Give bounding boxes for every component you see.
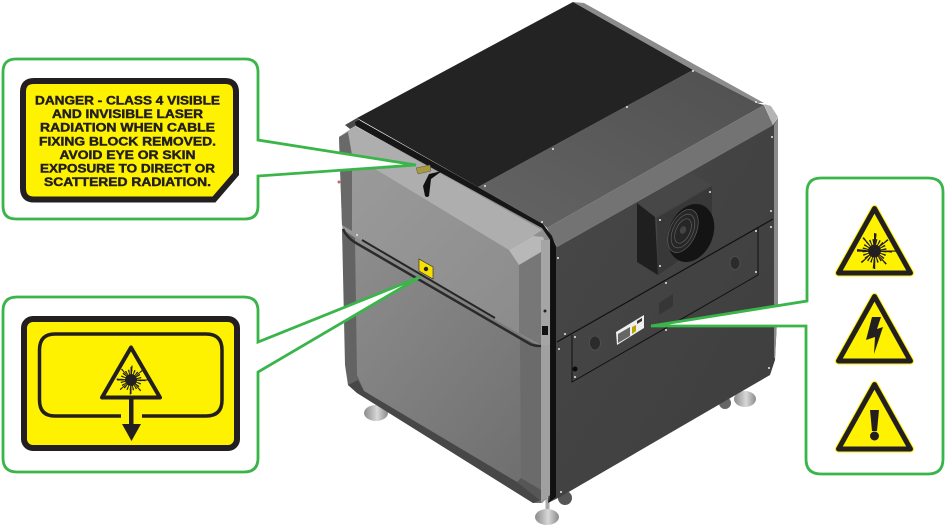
panel round ports (590, 256, 740, 350)
aperture sign (24, 319, 237, 448)
danger text: EXPOSURE TO DIRECT OR (40, 162, 215, 176)
top rear silver trim (573, 2, 764, 103)
danger text: DANGER - CLASS 4 VISIBLE (35, 94, 220, 108)
laser triangle (102, 348, 160, 398)
icon: laser warning (838, 208, 910, 273)
callout: rear hazard symbols (651, 178, 943, 474)
latch strap (423, 171, 442, 197)
door seam (343, 229, 541, 346)
top black panel (357, 2, 693, 187)
callout outline (651, 178, 943, 474)
inner frame (40, 334, 222, 416)
feet (364, 391, 756, 525)
danger text: RADIATION WHEN CABLE (40, 120, 215, 134)
rear data label (616, 315, 644, 345)
danger text: AND INVISIBLE LASER (52, 107, 203, 121)
fan housing (637, 172, 723, 275)
top light band (547, 105, 773, 247)
switch (542, 326, 548, 335)
screws (356, 70, 773, 493)
callout: laser aperture label (3, 277, 420, 472)
top grey panel (478, 70, 764, 228)
danger text (35, 94, 220, 189)
laser burst (117, 367, 148, 394)
right edge strip (774, 118, 778, 358)
side panel outlines (557, 219, 773, 342)
vent holes (659, 294, 673, 315)
danger text: SCATTERED RADIATION. (44, 175, 211, 189)
lower door (342, 229, 550, 503)
small door label (419, 259, 433, 279)
vertical black rim (548, 238, 556, 503)
top corner chamfer (764, 104, 778, 125)
upper door (339, 126, 550, 345)
danger text: FIXING BLOCK REMOVED. (39, 134, 216, 148)
callout outline (3, 277, 420, 472)
icon: general warning (838, 384, 910, 449)
callout: danger text label (3, 59, 416, 219)
left black rim (355, 120, 556, 500)
danger text: AVOID EYE OR SKIN (60, 148, 196, 162)
top left end strip (345, 118, 362, 129)
callout outline (3, 59, 416, 219)
machine (338, 2, 778, 525)
arrow (122, 398, 141, 441)
top door label (416, 165, 431, 174)
icon: electric hazard (838, 296, 910, 361)
right side panel (548, 118, 778, 503)
danger sign (23, 81, 236, 200)
